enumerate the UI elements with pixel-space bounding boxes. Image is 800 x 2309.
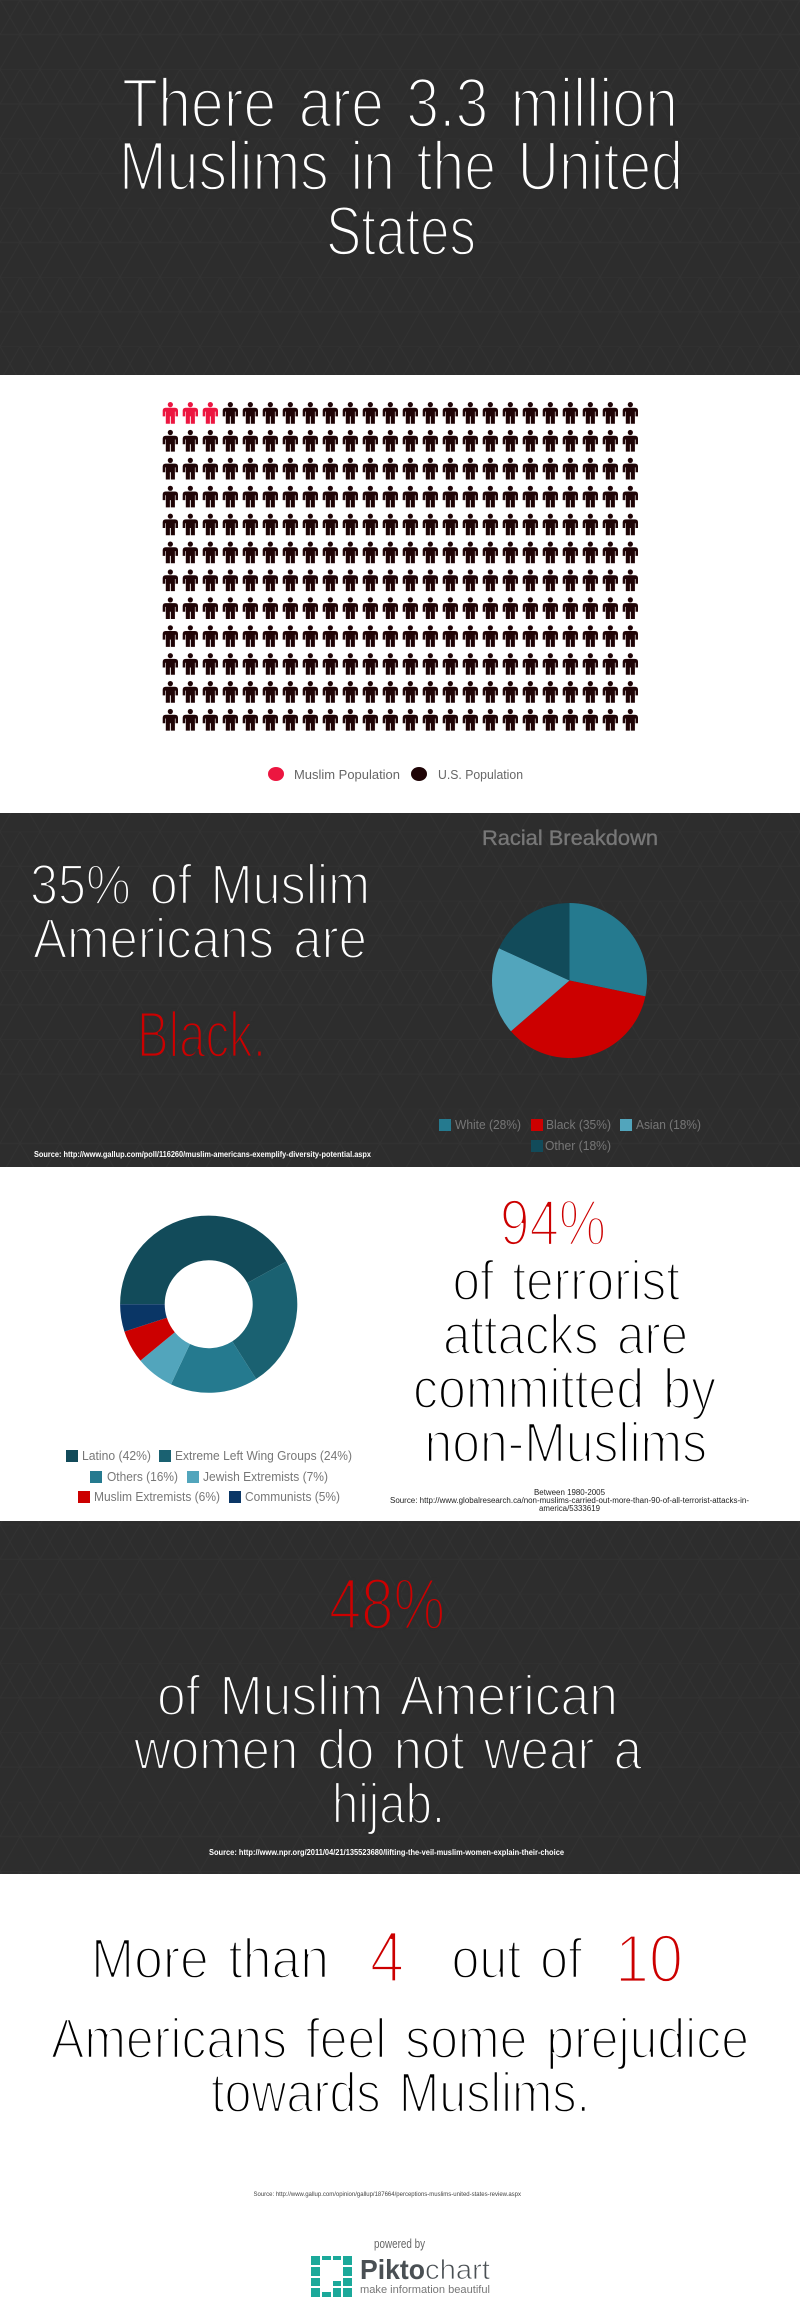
statement: non-Muslims <box>413 1249 716 1475</box>
statement: more than 4 out of 10: 4 <box>370 1918 404 1998</box>
statement: hijab: women do not wear a <box>133 1718 642 1782</box>
source note <box>390 1488 749 1513</box>
statement: Americans feel prejudice <box>51 2007 749 2125</box>
title heading: There are 3.3 million <box>122 64 678 142</box>
statement: non-Muslims: non-Muslims <box>424 1411 707 1475</box>
source note: Source: http://www.npr.org/2011/04/21/135523680/lifting-the-veil-muslim-women-explain-their-choice <box>209 1848 565 1857</box>
chart heading: Racial Breakdown <box>482 827 658 850</box>
statement: more than 4 out of 10: out of <box>452 1927 582 1991</box>
donut legend: Jewish Extremists (7%) <box>203 1469 328 1484</box>
title heading: States <box>326 192 476 270</box>
statement: 35% of Muslim Americans <box>30 853 370 971</box>
tagline: make information beautiful <box>360 2284 490 2296</box>
statement: hijab: hijab. <box>332 1772 445 1836</box>
statement: 35% of Muslim Americans: Americans are <box>33 907 367 971</box>
source note: Between 1980-2005 <box>534 1488 606 1497</box>
pictogram legend <box>268 767 523 782</box>
statement: hijab: of Muslim American <box>157 1664 618 1728</box>
source note: america/5333619 <box>539 1504 601 1513</box>
statement: more than 4 out of 10: More than <box>91 1927 329 1991</box>
highlight: 48%: 48% <box>329 1565 445 1645</box>
pie legend: Asian (18%) <box>636 1117 701 1132</box>
statement: more than 4 out of 10: 10 <box>615 1921 683 1997</box>
donut legend: Communists (5%) <box>245 1489 340 1504</box>
title heading <box>119 64 683 270</box>
pie legend <box>439 1117 701 1153</box>
panel: terrorist attacks <box>66 1186 749 1513</box>
Piktochart branding <box>311 2237 490 2297</box>
wordmark: Pikto <box>360 2254 425 2285</box>
donut legend: Others (16%) <box>107 1469 178 1484</box>
statement: non-Muslims: of terrorist <box>452 1249 680 1313</box>
donut chart <box>120 1216 297 1393</box>
highlight: 94%: 94% <box>500 1186 606 1259</box>
title heading: Muslims in the United <box>119 127 683 205</box>
statement: non-Muslims: attacks are <box>443 1303 688 1367</box>
statement: more than 4 out of 10 <box>91 1918 683 1998</box>
statement: non-Muslims: committed by <box>413 1357 716 1421</box>
pictogram legend: U.S. Population <box>438 768 523 782</box>
Piktochart branding: chart <box>425 2254 490 2285</box>
statement: hijab <box>133 1664 642 1836</box>
pie legend: Black (35%) <box>546 1117 611 1132</box>
panel: title <box>0 0 800 375</box>
panel: racial breakdown <box>0 813 800 1167</box>
donut legend: Latino (42%) <box>82 1448 151 1463</box>
donut legend: Muslim Extremists (6%) <box>94 1489 220 1504</box>
panel: population pictogram <box>163 402 638 782</box>
icon: Piktochart logo <box>311 2256 352 2297</box>
panel: prejudice <box>51 1918 749 2198</box>
donut legend <box>66 1448 352 1504</box>
pictogram legend: Muslim Population <box>294 768 400 782</box>
donut legend: Extreme Left Wing Groups (24%) <box>175 1448 352 1463</box>
source note: Source: http://www.gallup.com/opinion/gallup/187664/perceptions-muslims-united-states-review.aspx <box>254 2191 522 2198</box>
highlight: Black.: Black. <box>137 998 266 1071</box>
source note: Source: http://www.globalresearch.ca/non-muslims-carried-out-more-than-90-of-all-terrorist-attacks-in- <box>390 1496 749 1505</box>
statement: 35% of Muslim Americans: 35% of Muslim <box>30 853 370 917</box>
pictogram grid: 3 Muslim figures out of 288 <box>163 402 638 731</box>
pie chart <box>492 903 647 1058</box>
pie legend: White (28%) <box>455 1117 521 1132</box>
Piktochart branding: powered by <box>374 2237 426 2251</box>
pie legend: Other (18%) <box>545 1138 611 1153</box>
panel: hijab <box>0 1521 800 1874</box>
statement: Americans feel prejudice: towards Muslims. <box>211 2061 590 2125</box>
source note: Source: http://www.gallup.com/poll/116260/muslim-americans-exemplify-diversity-potential.aspx <box>34 1150 372 1159</box>
